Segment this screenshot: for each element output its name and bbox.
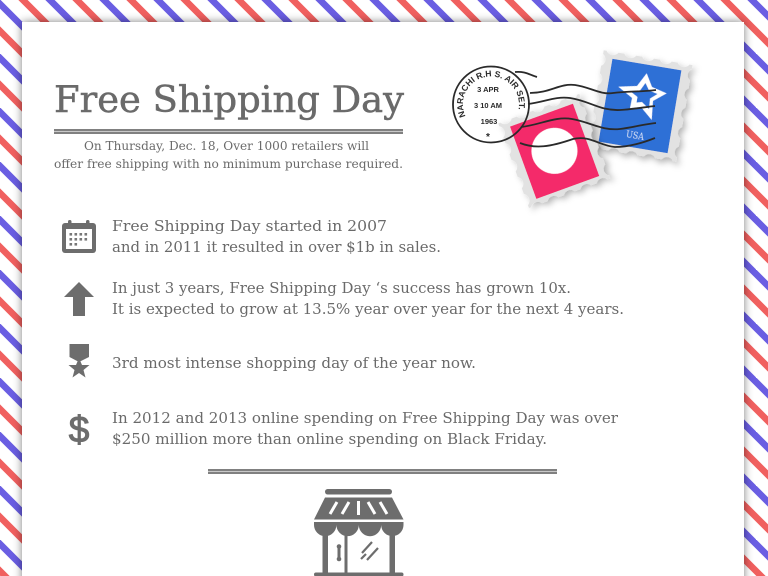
- pink stamp: [498, 94, 610, 208]
- fact 4 text: In 2012 and 2013 online spending on Free Shipping Day was over: [112, 411, 618, 427]
- fact 1 text: and in 2011 it resulted in over $1b in sales.: [112, 240, 441, 256]
- postmark cancellation: 1963: [481, 117, 497, 126]
- postmark cancellation: NARACHI R.H S. AIR SET.: [457, 70, 525, 118]
- fact 1: calendar icon: [62, 220, 96, 253]
- fact 1 text: Free Shipping Day started in 2007: [112, 219, 387, 235]
- title rule: [54, 129, 403, 134]
- postmark cancellation: 3 10 AM: [474, 101, 502, 110]
- intro text: On Thursday, Dec. 18, Over 1000 retailers will: [84, 138, 369, 153]
- postmark cancellation: [452, 66, 656, 148]
- fact 4 text: $250 million more than online spending on Black Friday.: [112, 432, 547, 448]
- postmark cancellation: 3 APR: [477, 85, 499, 94]
- fact 4 text: [112, 411, 618, 448]
- fact 2: up arrow icon: [64, 282, 94, 316]
- fact 2 text: In just 3 years, Free Shipping Day ‘s success has grown 10x.: [112, 281, 571, 297]
- title: Free Shipping Day: [54, 78, 404, 121]
- fact 4: dollar icon: $: [69, 409, 89, 450]
- blue USA stamp: USA: [625, 130, 645, 143]
- postage stamps illustration: [452, 50, 698, 212]
- fact 1 text: [112, 219, 441, 256]
- blue USA stamp: [588, 50, 692, 162]
- icon: storefront: [314, 489, 404, 576]
- postmark cancellation: *: [486, 132, 490, 143]
- section rule: [208, 469, 557, 474]
- intro text: [54, 138, 403, 171]
- fact 3 text: 3rd most intense shopping day of the year now.: [112, 356, 476, 372]
- intro text: offer free shipping with no minimum purchase required.: [54, 156, 403, 171]
- fact 2 text: It is expected to grow at 13.5% year over year for the next 4 years.: [112, 302, 624, 318]
- fact 3: medal icon: [68, 344, 90, 378]
- fact 2 text: [112, 281, 624, 318]
